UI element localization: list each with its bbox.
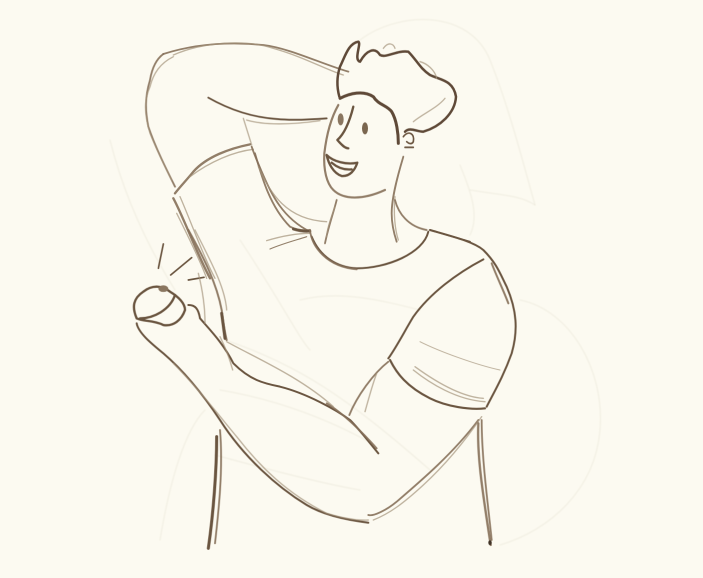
eyes (338, 113, 368, 134)
t-shirt sleeve (388, 259, 500, 409)
raised sleeve (173, 144, 253, 278)
fist (134, 285, 185, 325)
left torso upper edge (188, 230, 227, 340)
hair (337, 42, 456, 132)
upper arm underside (368, 420, 478, 515)
hair inner strokes (383, 44, 445, 122)
small strain strokes (158, 244, 204, 280)
lower flexed arm and torso (134, 230, 516, 548)
faint underdrawing (110, 20, 600, 545)
hairline (340, 93, 398, 143)
mouth (327, 155, 357, 176)
nose (337, 107, 353, 148)
left torso lower edge (208, 430, 221, 548)
second pass forearm line (173, 363, 368, 520)
upper raised arm and head (145, 42, 470, 280)
underarm torso strokes (349, 362, 388, 415)
ear (403, 133, 414, 147)
torso left edge near armpit (252, 147, 327, 249)
shoulder top (430, 230, 470, 242)
raised arm outline (145, 43, 348, 187)
right shoulder outline (430, 230, 516, 407)
inner bicep line (188, 305, 378, 453)
neck (325, 157, 427, 243)
collar (310, 230, 428, 269)
face outline (324, 105, 385, 197)
body and forearm outer outline (137, 323, 368, 523)
right torso edge (478, 420, 492, 545)
